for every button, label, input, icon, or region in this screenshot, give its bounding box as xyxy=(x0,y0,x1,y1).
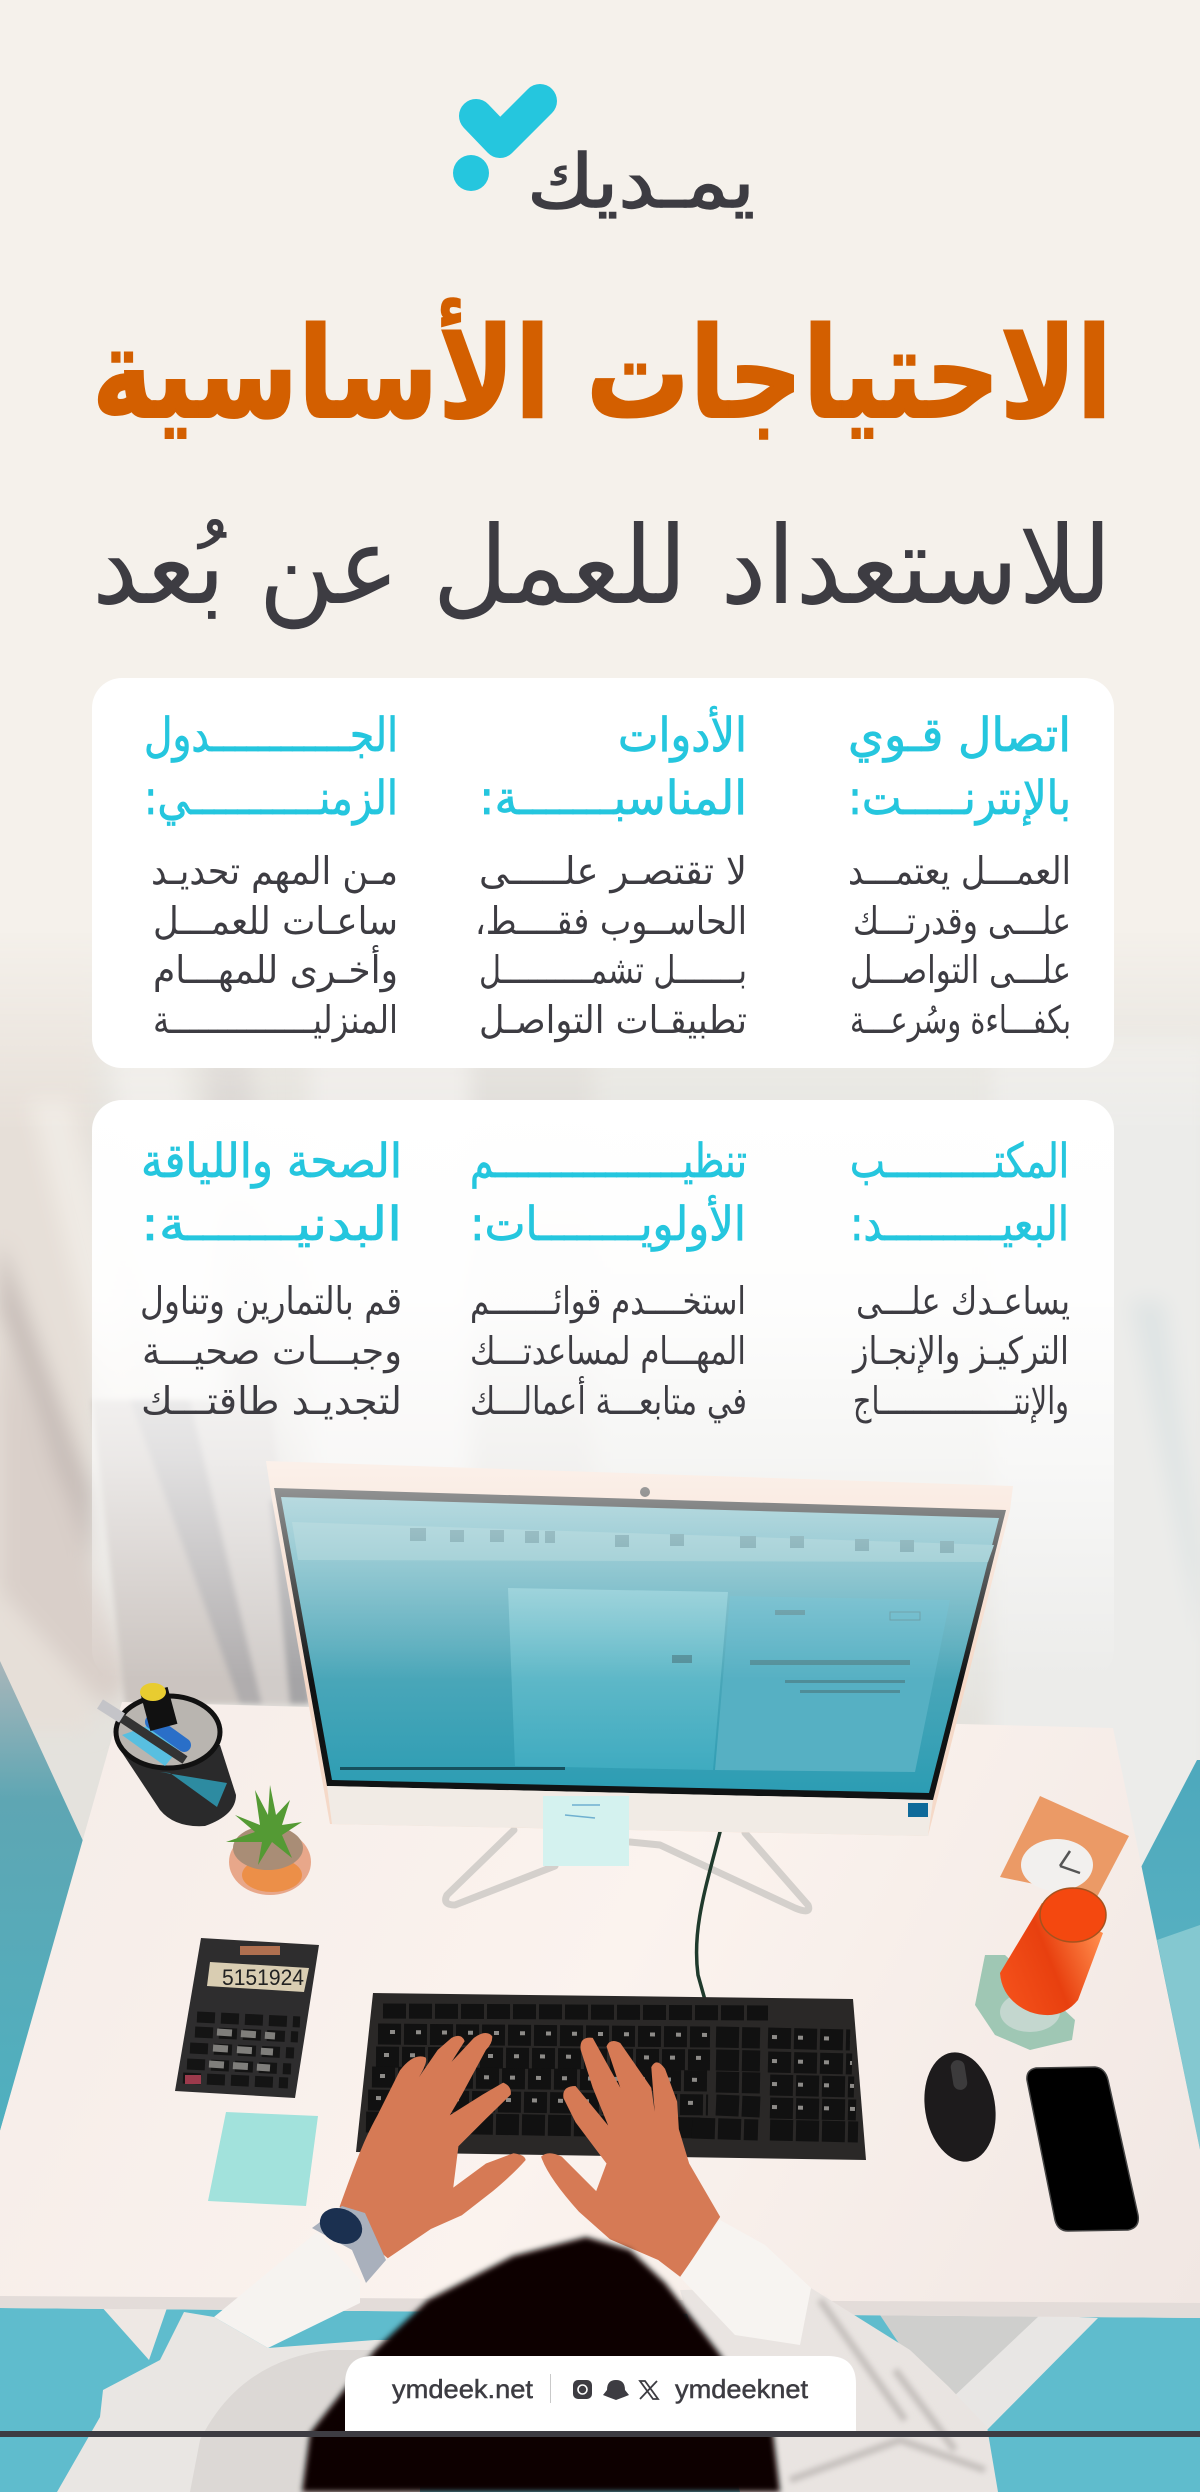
column: priorities: الأولويــــــــات: xyxy=(470,1194,746,1252)
column: fitness: الصحة واللياقة xyxy=(141,1134,402,1189)
column: priorities: المهـــام لمساعدتـــك xyxy=(470,1329,746,1374)
photo: left cuff and sleeve xyxy=(214,2232,360,2348)
photo: right hand xyxy=(541,2038,720,2277)
photo: keyboard xyxy=(356,1993,866,2160)
column: priorities: في متابعـــة أعمالـــك xyxy=(470,1376,747,1423)
background: floor and desk surroundings xyxy=(0,1661,1200,2492)
photo: man's head xyxy=(302,2237,780,2492)
subtitle: للاستعداد للعمل عن بُعد xyxy=(92,504,1112,629)
column: fitness: وجبـــات صحيـــة xyxy=(142,1329,402,1374)
column: schedule xyxy=(144,708,398,1043)
handle: ymdeeknet xyxy=(675,2374,809,2404)
column: remote office: البعيــــــــــد: xyxy=(850,1197,1069,1252)
column: schedule: الجــــــــــــدول xyxy=(144,708,398,763)
column: tools: الأدوات xyxy=(618,705,747,763)
column: tools: تطبيقـات التواصـل xyxy=(479,998,747,1043)
column: fitness: البدنيـــــــة: xyxy=(141,1197,402,1252)
photo: glass on leaf coaster xyxy=(975,1888,1106,2050)
column: tools xyxy=(475,705,747,1043)
column: remote office: التركيـز والإنجـاز xyxy=(851,1329,1069,1374)
photo: sticky notes pad xyxy=(208,2112,318,2206)
column: schedule: ساعـات للعمـــل xyxy=(153,899,398,943)
photo: mouse xyxy=(917,2047,1003,2167)
photo: phone xyxy=(1027,2067,1138,2231)
column: schedule: المنزليـــــــــــــــة xyxy=(153,998,398,1043)
photo: plant xyxy=(226,1785,311,1895)
column: internet: بالإنترنـــــت: xyxy=(848,771,1071,826)
column: internet: بكفـــاءة وسُرعـــة xyxy=(850,998,1071,1043)
photo: left hand xyxy=(340,2033,526,2258)
column: priorities: تنظيـــــــــــــــــم xyxy=(470,1134,747,1189)
column: remote office xyxy=(850,1134,1070,1424)
photo: calculator: 5151924 xyxy=(222,1965,304,1990)
column: tools: الحاســوب فقــــط، xyxy=(475,899,747,944)
column: internet: علـــى وقدرتـــك xyxy=(853,899,1071,944)
photo: pen holder xyxy=(100,1683,236,1826)
photo: monitor xyxy=(266,1461,1013,1836)
background: curtains xyxy=(0,1014,1200,1866)
column: tools: بـــــــل تشمــــــــــل xyxy=(479,948,747,992)
photo: sticky note on monitor xyxy=(543,1796,629,1866)
column: internet: اتصال قـوي xyxy=(848,708,1071,763)
panel: top requirements xyxy=(92,678,1114,1068)
column: fitness xyxy=(140,1134,402,1423)
photo: clock xyxy=(1000,1796,1129,1897)
icon: check mark xyxy=(476,101,540,141)
column: remote office: والإنتــــــــــــــــاج xyxy=(853,1379,1069,1424)
website: ymdeek.net xyxy=(392,2374,534,2404)
photo: monitor stand and cable xyxy=(446,1830,809,2000)
icon: snapchat xyxy=(603,2380,629,2400)
column: internet: العمـــل يعتمـــد xyxy=(848,849,1071,893)
photo: shirt xyxy=(57,2288,998,2492)
panel: bottom requirements xyxy=(92,1100,1114,1680)
column: tools: المناسبـــــــة: xyxy=(479,771,747,826)
column: priorities xyxy=(470,1134,747,1423)
column: priorities: استخــــدم قوائـــــــم xyxy=(470,1279,746,1324)
photo: right cuff and sleeve xyxy=(680,2220,811,2345)
photo: watch xyxy=(312,2201,386,2283)
column: internet: علـــى التواصـــل xyxy=(850,948,1071,993)
icon: logo dot xyxy=(453,155,489,191)
column: schedule: الزمنـــــــــــي: xyxy=(144,771,398,826)
column: fitness: قم بالتمارين وتناول xyxy=(140,1279,402,1324)
logo xyxy=(453,101,755,225)
photo: desk xyxy=(0,1702,1200,2318)
column: fitness: لتجديـد طاقتـــك xyxy=(141,1379,402,1423)
icon: x xyxy=(640,2381,658,2399)
column: internet xyxy=(848,708,1071,1043)
column: tools: لا تقتصـر علـــــى xyxy=(479,849,747,894)
column: schedule: مـن المهم تحديـد xyxy=(151,849,398,894)
column: schedule: وأخـرى للمهـــام xyxy=(153,945,398,993)
footer bar line xyxy=(0,2431,1200,2437)
icon: instagram xyxy=(573,2380,592,2399)
footer contact tab xyxy=(345,2356,856,2431)
column: remote office: يساعـدك علـــى xyxy=(856,1279,1070,1323)
column: remote office: المكتــــــــــب xyxy=(850,1134,1069,1189)
photo: calculator xyxy=(175,1938,319,2098)
curtain folds behind desk xyxy=(92,1400,310,1704)
logo wordmark: يمـديك xyxy=(527,139,755,225)
